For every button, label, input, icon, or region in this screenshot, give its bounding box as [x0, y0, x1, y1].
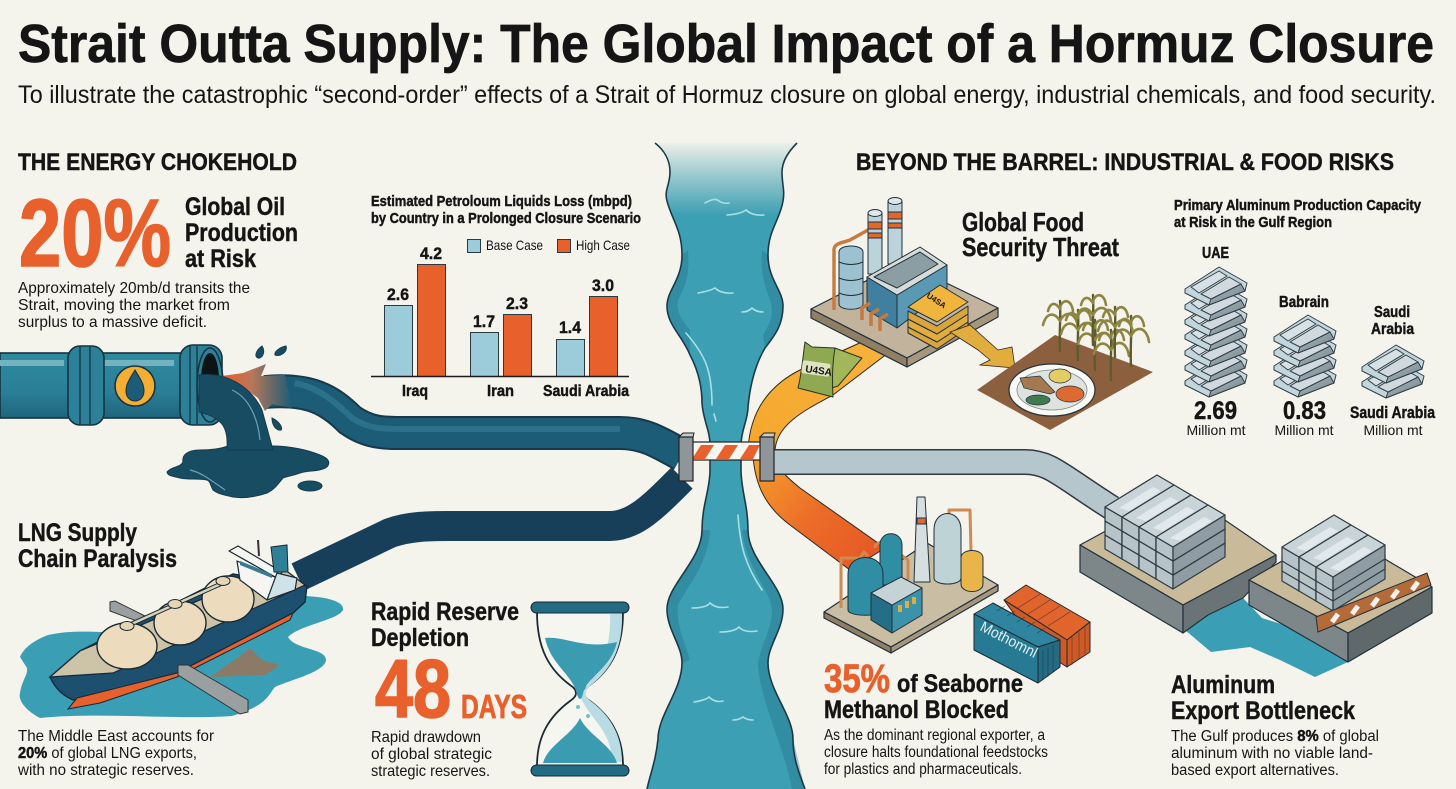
text block: LNG: with no strategic reserves. — [17, 762, 194, 779]
icon: striped port barricade — [1316, 573, 1431, 632]
icon: green fertilizer sacks — [798, 342, 862, 397]
ingot stack: Saudi Arabia: Arabia — [1371, 321, 1414, 338]
ingot stack: Saudi Arabia: Million mt — [1363, 422, 1423, 438]
text block: primary aluminum title — [1174, 197, 1422, 231]
heading: LNG supply chain paralysis: Chain Paralysis — [18, 545, 177, 573]
bar chart: petroleum liquids loss: 3.0 — [592, 276, 614, 295]
ingot stack: UAE: UAE — [1202, 245, 1229, 262]
icon: crop field and food plate — [977, 295, 1153, 430]
heading: beyond the barrel: BEYOND THE BARREL: INDUSTRIAL & FOOD RISKS — [856, 149, 1394, 176]
ingot stack: Saudi Arabia — [1350, 304, 1435, 438]
heading: aluminum export bottleneck: Aluminum — [1171, 671, 1275, 699]
ingot stack: UAE: 2.69 — [1194, 397, 1237, 425]
stat: 20 percent: 20% — [19, 180, 171, 287]
bar chart: petroleum liquids loss: 1.7 — [473, 312, 495, 331]
icon: shipping containers — [974, 585, 1090, 683]
heading: global food security threat — [962, 207, 1119, 262]
heading: the energy chokehold: THE ENERGY CHOKEHOLD — [18, 149, 297, 176]
heading: global oil production at risk: Global Oil — [185, 193, 285, 221]
heading: global oil production at risk: at Risk — [185, 245, 256, 273]
icon: fertilizer plant — [811, 198, 998, 367]
heading: rapid reserve depletion — [371, 598, 519, 652]
oil pipe break flare — [222, 364, 292, 411]
central strait of water — [647, 143, 805, 789]
text block: reserves: strategic reserves. — [371, 763, 490, 780]
heading: global oil production at risk — [185, 193, 298, 273]
icon: shipping containers: Mothomnl — [977, 618, 1040, 662]
bar chart: petroleum liquids loss: Estimated Petroloum Liquids Loss (mbpd) — [371, 193, 632, 210]
heading: global oil production at risk: Production — [185, 219, 298, 247]
text block: aluminum: The Gulf produces 8% of global — [1171, 728, 1379, 745]
icon: fertilizer plant: U4SA — [925, 291, 948, 310]
ingot stack: Saudi Arabia: Saudi — [1374, 304, 1410, 321]
text block: methanol: As the dominant regional exporter, a — [824, 727, 1045, 744]
text block: aluminum — [1171, 728, 1379, 779]
stat heading: 35 percent methanol — [824, 657, 1023, 724]
ingot stack: Saudi Arabia: Saudi Arabia — [1350, 403, 1435, 422]
text block: methanol: for plastics and pharmaceuticals. — [824, 761, 1022, 778]
bar chart: petroleum liquids loss: Base Case — [486, 237, 543, 253]
icon: closed barrier — [679, 433, 775, 481]
heading: LNG supply chain paralysis: LNG Supply — [18, 519, 137, 547]
bar chart: petroleum liquids loss: 1.4 — [559, 318, 581, 337]
leaking oil stream pipe to the barrier — [265, 383, 682, 455]
text block: reserves — [371, 729, 492, 780]
bar chart: petroleum liquids loss: 2.6 — [387, 285, 409, 304]
bar chart: petroleum liquids loss: 2.3 — [506, 294, 528, 313]
heading: rapid reserve depletion: Rapid Reserve — [371, 598, 519, 626]
ingot stack: Bahrain: Babrain — [1279, 294, 1329, 311]
bar chart: petroleum liquids loss: by Country in a Prolonged Closure Scenario — [371, 210, 641, 227]
heading: global food security threat: Global Food — [962, 207, 1084, 237]
text block: oil transit: surplus to a massive deficit. — [18, 314, 207, 331]
bar chart: petroleum liquids loss: Saudi Arabia — [543, 383, 629, 400]
heading: aluminum export bottleneck — [1171, 671, 1355, 725]
ingot stack: UAE — [1185, 245, 1247, 438]
heading: aluminum export bottleneck: Export Bottleneck — [1171, 697, 1355, 725]
ingot stack: Bahrain: 0.83 — [1283, 397, 1326, 425]
ingot stack: Bahrain — [1274, 294, 1336, 438]
text block: primary aluminum title: Primary Aluminum Production Capacity — [1174, 197, 1422, 214]
orange route to methanol plant — [753, 455, 885, 570]
icon: LNG tanker run aground — [20, 540, 343, 718]
yellow route to food plant — [748, 336, 892, 452]
bar chart: petroleum liquids loss: Iraq — [402, 383, 428, 400]
text block: methanol: closure halts foundational feedstocks — [824, 744, 1048, 761]
bar chart: petroleum liquids loss: 4.2 — [420, 244, 442, 263]
text block: methanol — [824, 727, 1048, 778]
grey route to aluminum — [772, 462, 1112, 508]
icon: aluminum platforms and water — [1080, 475, 1432, 677]
text block: primary aluminum title: at Risk in the Gulf Region — [1174, 214, 1332, 231]
text block: aluminum: based export alternatives. — [1171, 762, 1339, 779]
text block: aluminum: aluminum with no viable land- — [1171, 745, 1373, 762]
stat: 48 days — [375, 642, 527, 735]
oil puddle and spill — [167, 346, 329, 498]
ingot stack: Bahrain: Million mt — [1274, 422, 1334, 438]
icon: yellow arrow to field — [950, 325, 1015, 368]
stat heading: 35 percent methanol: of Seaborne — [897, 670, 1023, 698]
bar chart: petroleum liquids loss: High Case — [576, 237, 630, 253]
icon: breached oil pipeline — [0, 345, 223, 425]
ingot stack: UAE: Million mt — [1186, 422, 1246, 438]
heading: rapid reserve depletion: Depletion — [371, 624, 469, 652]
stat heading: 35 percent methanol: Methanol Blocked — [824, 696, 1009, 724]
icon: methanol chemical plant — [824, 497, 998, 653]
text block: reserves: Rapid drawdown — [371, 729, 481, 746]
heading: LNG supply chain paralysis — [18, 519, 177, 573]
text block: reserves: of global strategic — [371, 746, 492, 763]
stat: 48 days: DAYS — [461, 688, 527, 725]
heading: global food security threat: Security Threat — [962, 232, 1119, 262]
bar chart: petroleum liquids loss: Iran — [487, 383, 514, 400]
text block: LNG: The Middle East accounts for — [18, 728, 215, 745]
icon: hourglass — [531, 602, 629, 776]
text block: oil transit: Approximately 20mb/d transits the — [18, 280, 250, 297]
text block: LNG — [17, 728, 215, 779]
bar chart: petroleum liquids loss — [371, 193, 641, 400]
stat heading: 35 percent methanol: 35% — [824, 657, 890, 701]
icon: oil drop badge — [115, 366, 155, 406]
icon: green fertilizer sacks: U4SA — [805, 364, 833, 379]
text block: oil transit: Strait, moving the market from — [18, 297, 230, 314]
stat: 48 days: 48 — [375, 642, 451, 735]
text block: LNG: 20% of global LNG exports, — [18, 745, 197, 762]
LNG pipe to the barrier — [298, 478, 682, 577]
text block: oil transit — [18, 280, 250, 331]
